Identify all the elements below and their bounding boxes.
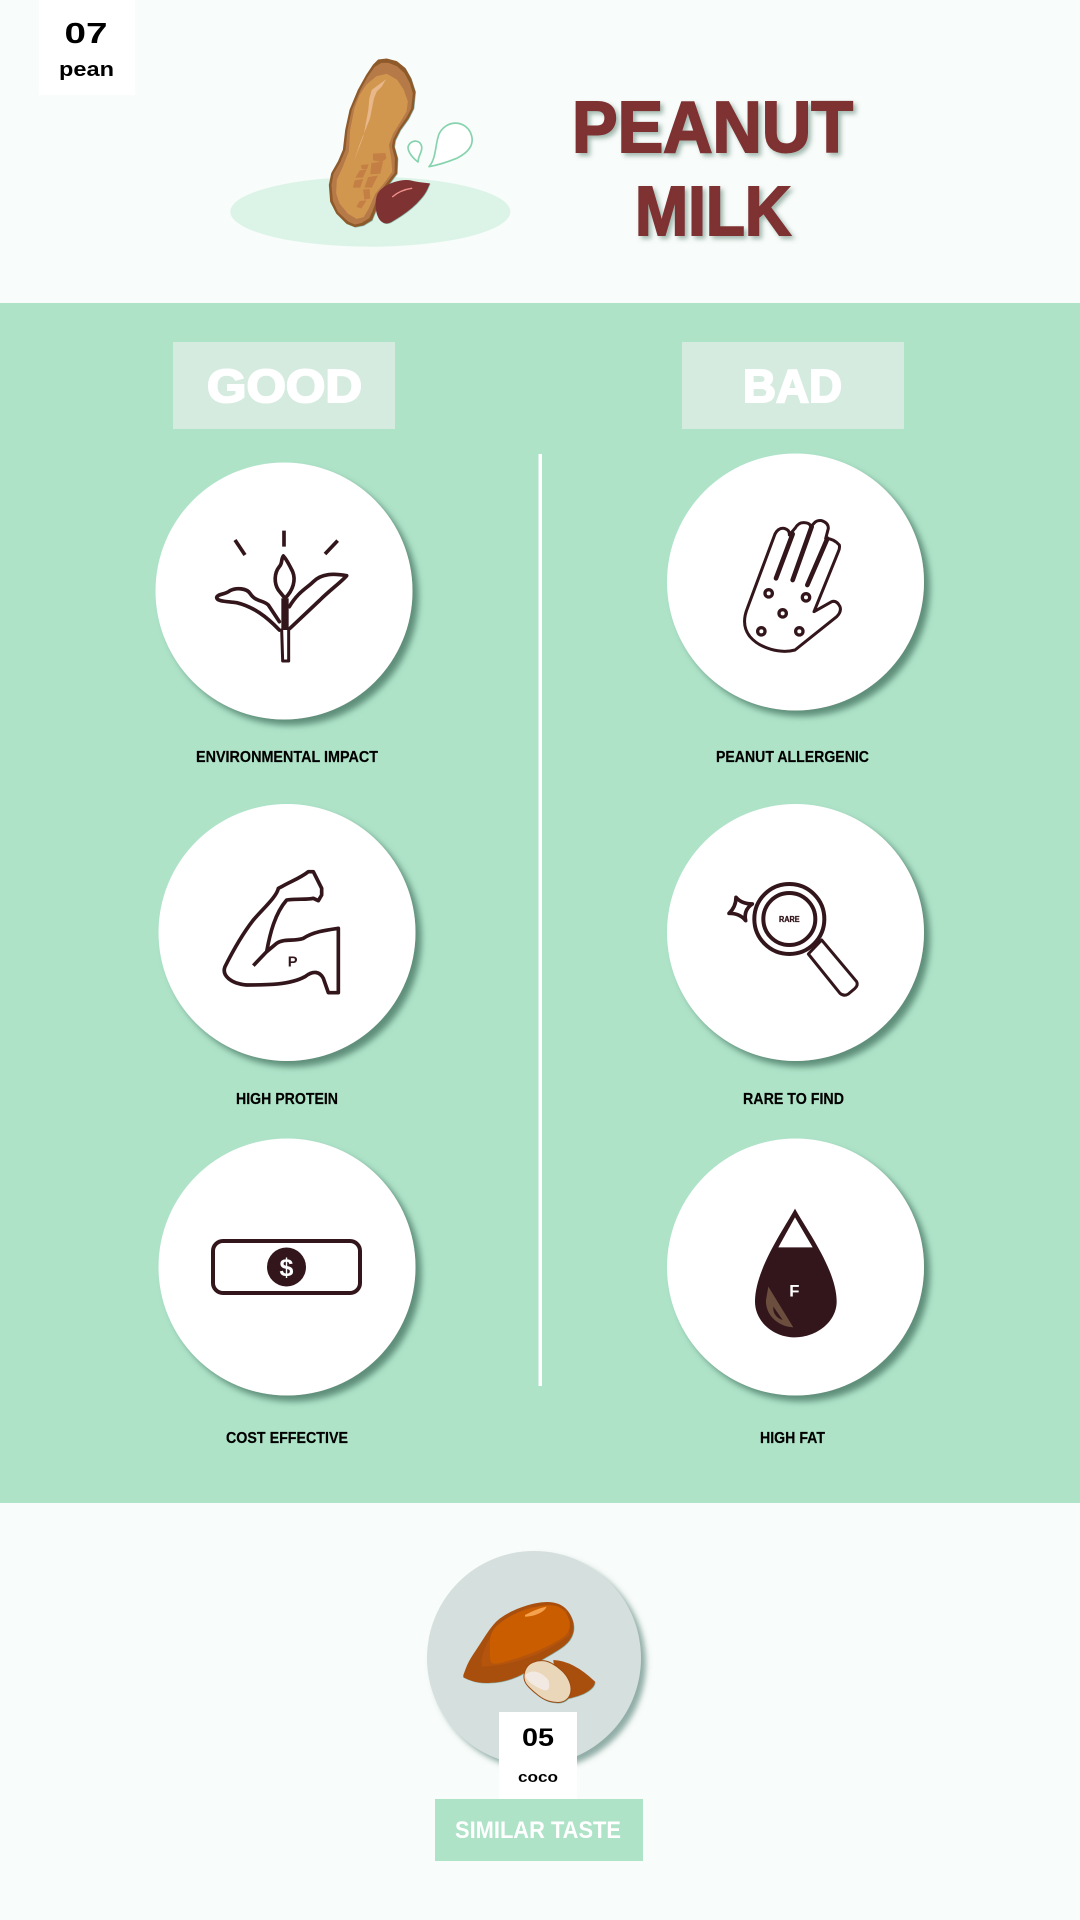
item: cost effective <box>158 1138 416 1447</box>
badge: 07 pean <box>39 0 135 95</box>
panel: good and bad comparison <box>0 303 1080 1503</box>
panel: similar taste <box>427 1551 643 1861</box>
icon: magnifier with sparkle <box>729 884 857 995</box>
icon: plant <box>217 531 347 661</box>
icon: banknote: $ <box>280 1254 294 1282</box>
label: HIGH PROTEIN <box>236 1091 338 1108</box>
badge: 07 pean: 07 <box>64 18 108 50</box>
badge: 07 pean: pean <box>59 59 114 81</box>
heading: good: GOOD <box>207 360 362 412</box>
icon: flexed arm: P <box>288 955 298 971</box>
heading: bad <box>682 342 904 429</box>
title: PEANUT <box>572 88 853 168</box>
heading: good <box>173 342 395 429</box>
icon: banknote <box>213 1241 360 1293</box>
peanut shell <box>329 59 415 227</box>
icon: fat drop: F <box>789 1282 799 1301</box>
item: high protein <box>158 804 416 1108</box>
label: PEANUT ALLERGENIC <box>716 749 869 766</box>
kernel <box>376 180 430 223</box>
item: rare to find <box>667 804 924 1108</box>
label: COST EFFECTIVE <box>226 1430 348 1447</box>
item: peanut allergenic <box>667 454 924 766</box>
title <box>572 88 853 250</box>
centre divider <box>538 454 542 1386</box>
badge: 05 coco: 05 <box>522 1724 554 1752</box>
similar taste label <box>435 1799 643 1861</box>
label: RARE TO FIND <box>743 1091 844 1108</box>
similar taste label: SIMILAR TASTE <box>455 1817 621 1844</box>
ground ellipse <box>230 177 510 247</box>
label: ENVIRONMENTAL IMPACT <box>196 749 378 766</box>
icon: hand with spots <box>745 521 840 651</box>
badge: 05 coco <box>499 1712 577 1799</box>
splash drops <box>408 123 472 167</box>
illustration: peanut with kernel and drops <box>230 59 510 247</box>
icon: magnifier with sparkle: RARE <box>779 915 800 924</box>
icon: fat drop <box>755 1209 837 1337</box>
circle backdrop <box>427 1551 641 1765</box>
title: MILK <box>635 172 791 250</box>
label: HIGH FAT <box>760 1430 825 1447</box>
badge: 05 coco: coco <box>518 1769 558 1786</box>
heading: bad: BAD <box>743 360 842 412</box>
icon: flexed arm <box>224 872 338 993</box>
illustration: nut <box>463 1602 595 1703</box>
item: high fat <box>667 1138 924 1447</box>
item: environmental impact <box>156 462 412 766</box>
